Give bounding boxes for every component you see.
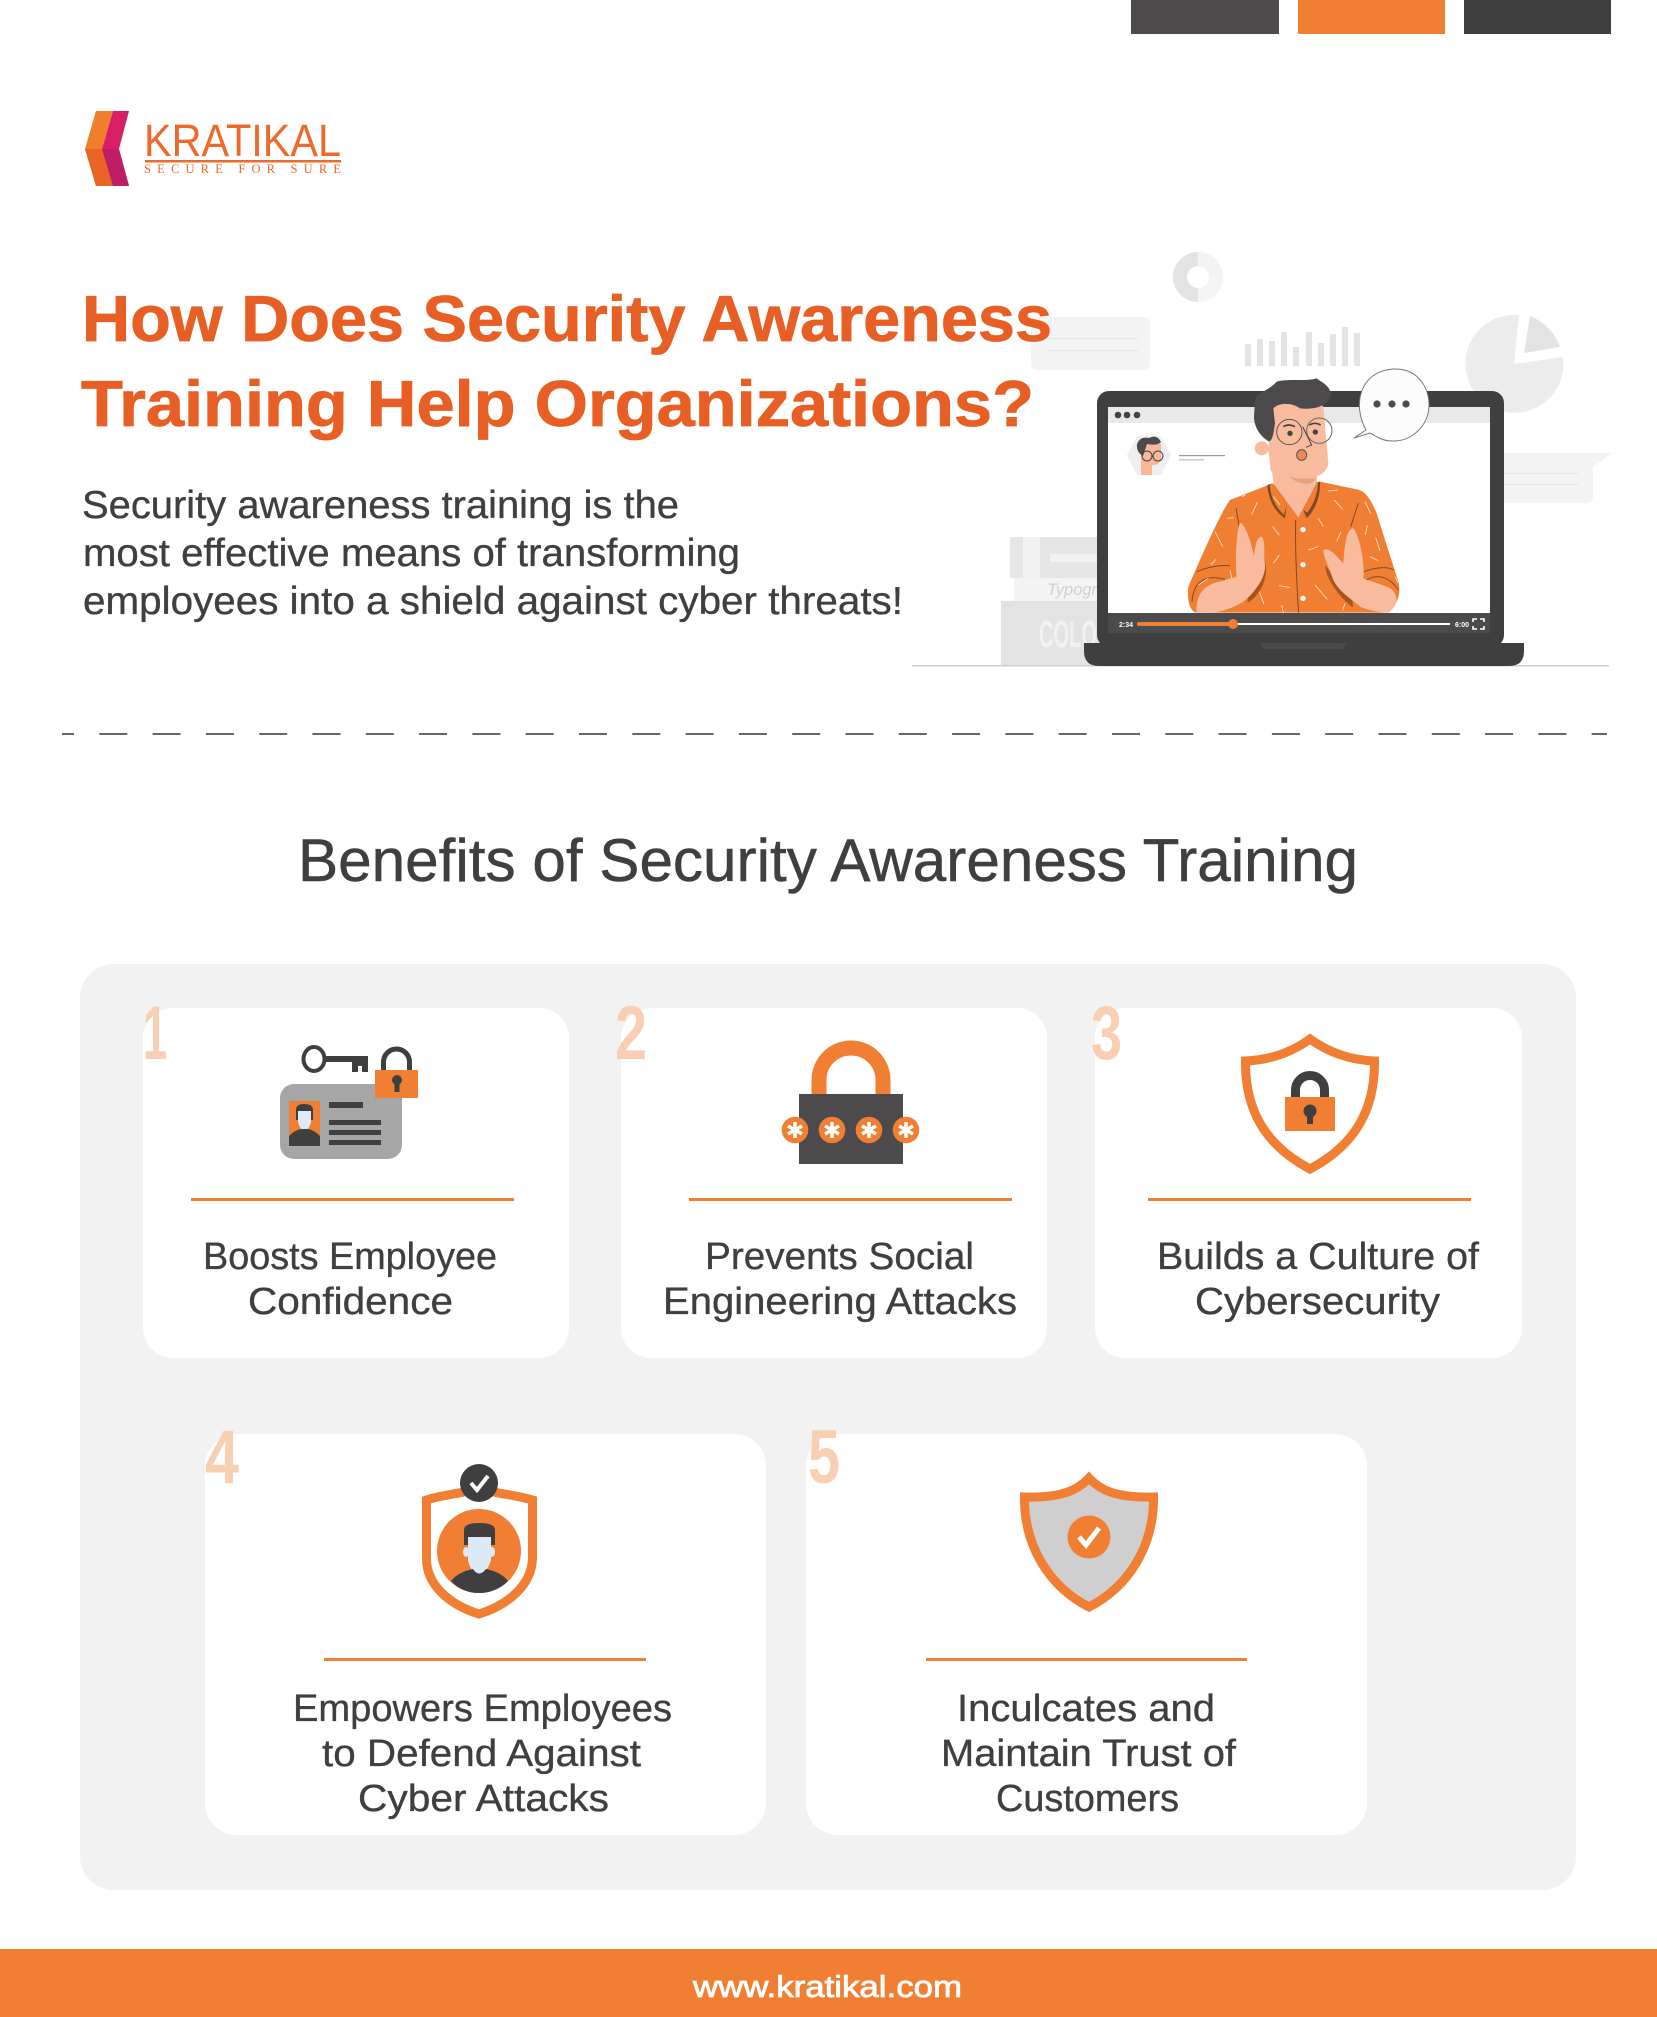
title <box>81 282 1052 440</box>
benefit 4 card: Cyber Attacks <box>358 1778 609 1820</box>
benefit 5 card: Maintain Trust of <box>941 1733 1236 1775</box>
panel: benefits background <box>80 964 1576 1890</box>
benefit 5 card: 5 <box>808 1415 840 1500</box>
benefit 3 card <box>1091 991 1522 1358</box>
benefit 3 card: Cybersecurity <box>1195 1281 1440 1323</box>
benefit 1 card <box>143 991 569 1358</box>
intro text: most effective means of transforming <box>83 532 740 575</box>
icon: shield with check <box>1024 1478 1154 1607</box>
presenter illustration <box>1188 378 1399 613</box>
logo: Kratikal <box>85 111 341 186</box>
video player bar <box>1108 613 1490 633</box>
benefit 4 card: 4 <box>205 1415 239 1500</box>
benefit 2 card: Engineering Attacks <box>663 1281 1017 1323</box>
icon: key, lock and ID card <box>280 1047 418 1159</box>
benefit 5 card <box>806 1415 1367 1835</box>
benefit 1 card: Boosts Employee <box>203 1236 497 1278</box>
logo: Kratikal: KRATIKAL <box>144 115 341 166</box>
video player bar: 2:34 <box>1119 622 1133 629</box>
benefit 5 card: Inculcates and <box>957 1688 1215 1730</box>
stacked books: COLO <box>1039 614 1097 656</box>
benefit 3 card: 3 <box>1091 991 1122 1076</box>
benefit 4 card: to Defend Against <box>322 1733 641 1775</box>
benefit 2 card <box>615 991 1047 1358</box>
icon: shield with lock <box>1245 1039 1375 1169</box>
stacked books: Typogr <box>1047 580 1098 599</box>
laptop <box>1084 391 1524 666</box>
benefit 4 card <box>205 1415 766 1835</box>
benefit 2 card: Prevents Social <box>705 1236 974 1278</box>
intro text <box>82 484 903 623</box>
section heading: Benefits of Security Awareness Training <box>298 827 1358 894</box>
title: Training Help Organizations? <box>81 367 1034 440</box>
benefit 2 card: 2 <box>615 991 647 1076</box>
background decorations behind laptop <box>912 252 1612 666</box>
benefit 5 card: Customers <box>996 1778 1179 1820</box>
stacked books <box>1001 537 1100 665</box>
speech bubble <box>1354 369 1429 441</box>
benefit 4 card: Empowers Employees <box>293 1688 672 1730</box>
footer <box>0 1949 1657 2017</box>
benefit 1 card: Confidence <box>248 1281 453 1323</box>
intro text: employees into a shield against cyber threats! <box>83 580 903 623</box>
logo: Kratikal: SECURE FOR SURE <box>144 162 341 176</box>
icon: employee shield <box>426 1464 532 1614</box>
video player bar: 6:00 <box>1455 622 1469 629</box>
benefit 1 card: 1 <box>143 991 167 1076</box>
top colour bars <box>1131 0 1611 34</box>
icon: password padlock <box>782 1048 919 1164</box>
footer: www.kratikal.com <box>692 1969 962 2004</box>
title: How Does Security Awareness <box>82 282 1052 355</box>
intro text: Security awareness training is the <box>82 484 679 527</box>
profile avatar in video <box>1127 436 1225 475</box>
benefit 3 card: Builds a Culture of <box>1157 1236 1479 1278</box>
